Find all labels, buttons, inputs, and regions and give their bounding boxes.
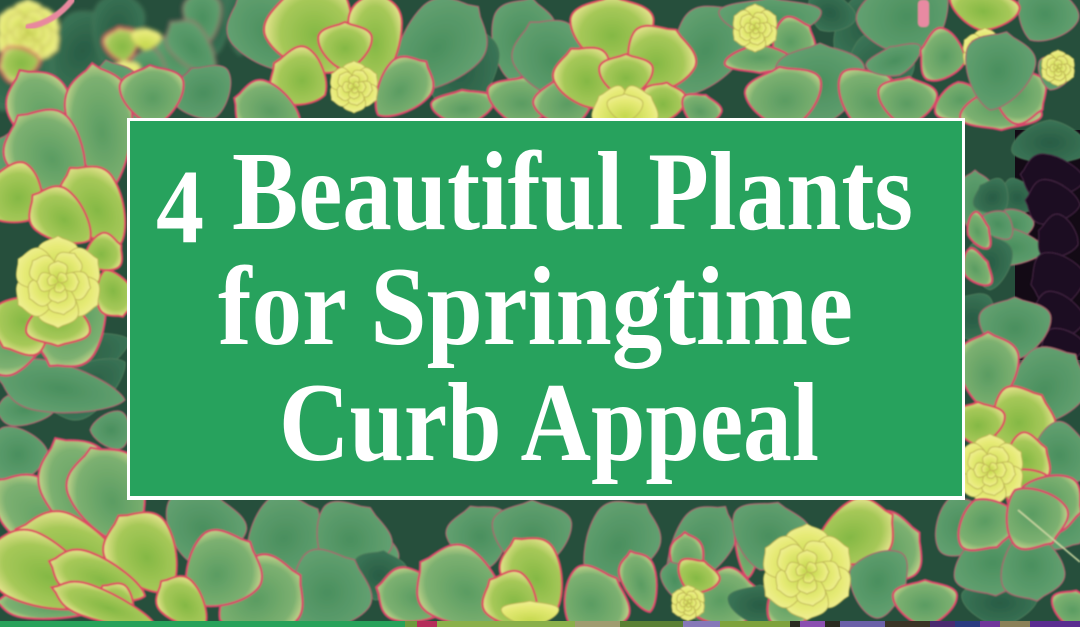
rosette: top right (846, 0, 1080, 132)
rosette: dark purple and small green, right (955, 24, 1080, 401)
leaves, top centre gap (118, 62, 559, 128)
rosette: small bottom centre (613, 491, 766, 627)
leaves, top centre-right (741, 15, 939, 145)
rosette: small top (719, 0, 915, 76)
title line 2: for Springtime (218, 245, 853, 369)
blurred plants, top left (0, 0, 265, 123)
pink flower stem, top right (918, 0, 929, 27)
plant stem, bottom right (1018, 510, 1080, 562)
rosette: large yellow, left (0, 54, 153, 486)
title panel (127, 118, 965, 500)
title numeral: 4 (156, 148, 204, 265)
rosette: top centre (500, 0, 761, 136)
bottom strip of next image (0, 621, 1080, 627)
title line 3: Curb Appeal (279, 361, 819, 485)
title text (156, 130, 913, 485)
title line 1: Beautiful Plants (232, 130, 913, 254)
rosette: bottom right (722, 472, 1080, 627)
rosette: top centre-left (163, 0, 563, 147)
rosette: bottom centre (370, 484, 676, 627)
rosette: right middle (938, 284, 1080, 562)
pink flower stem, top left (28, 0, 72, 27)
dark plant shadow, right side (1015, 130, 1080, 360)
rosette: bottom left (0, 420, 410, 627)
